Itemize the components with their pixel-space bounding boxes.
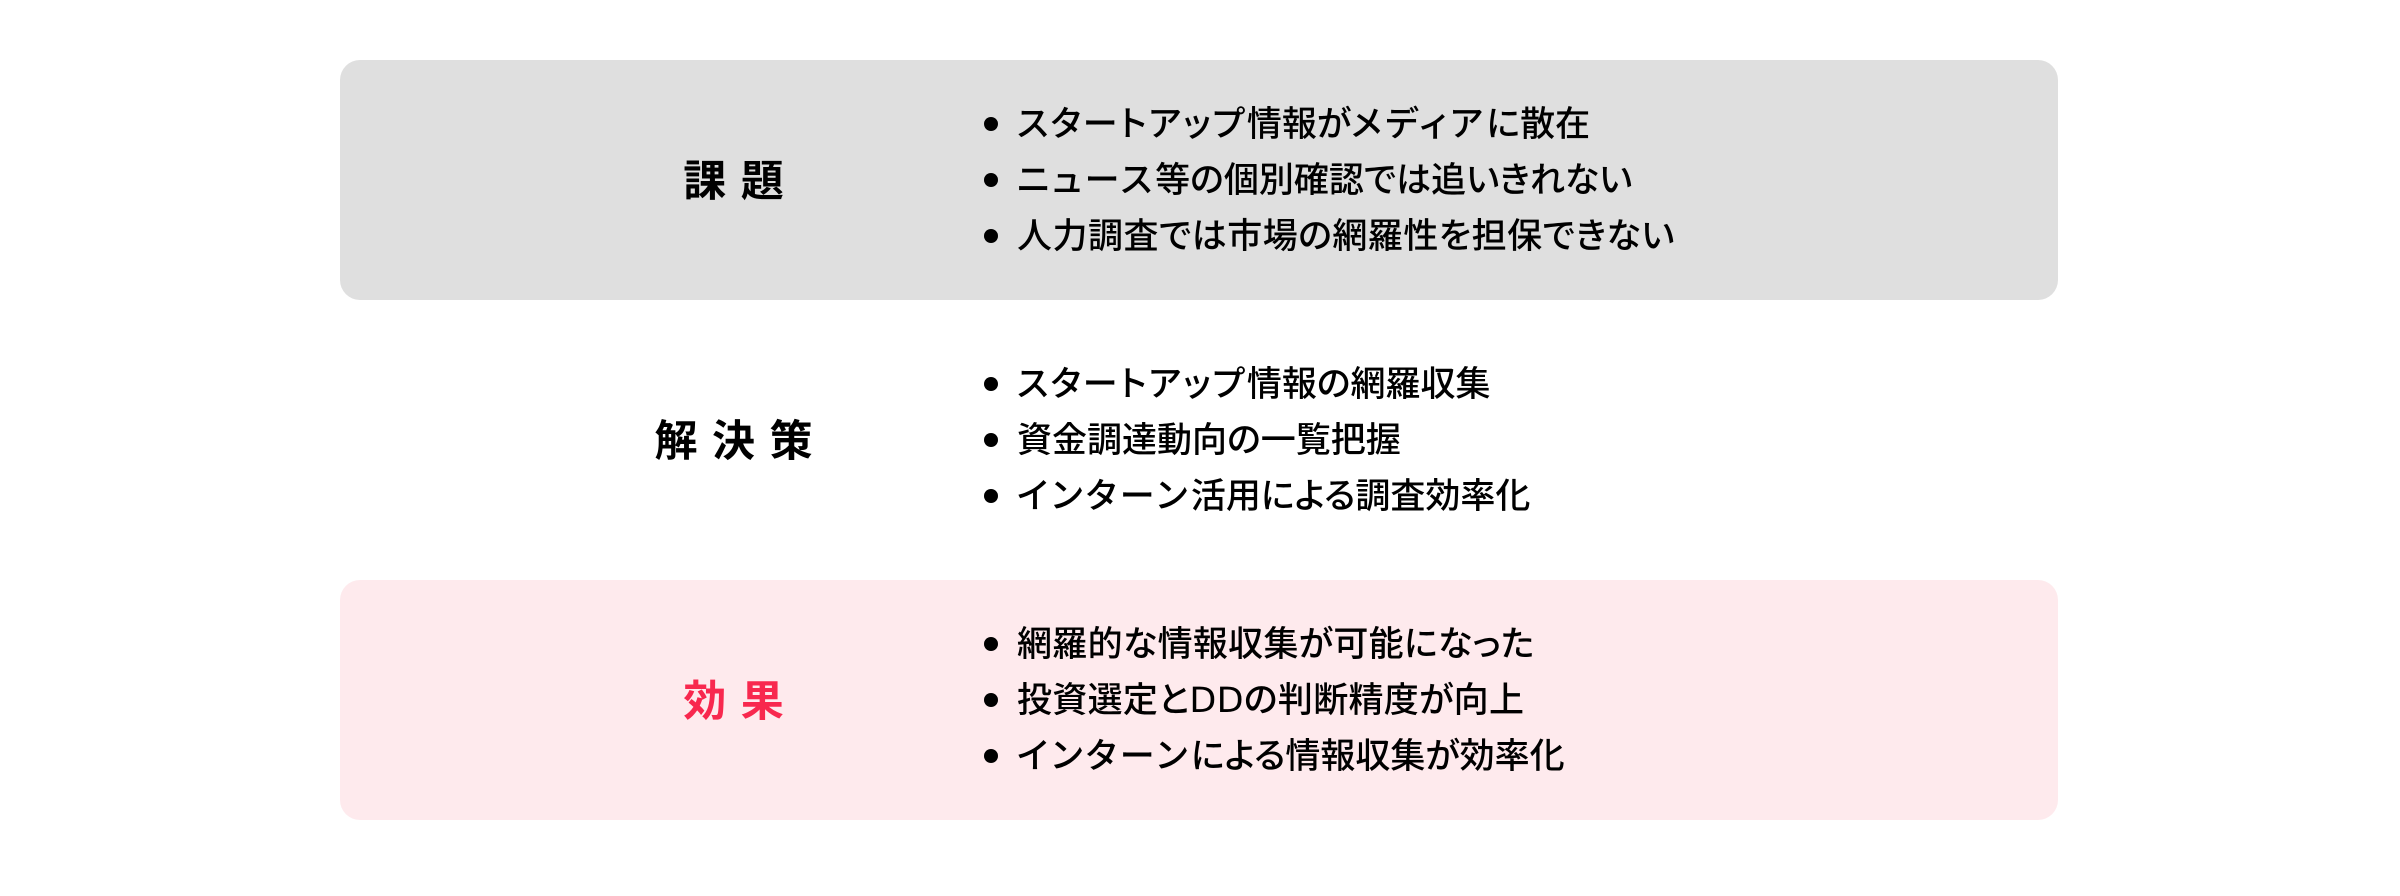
bullet: スタートアップ情報がメディアに散在: スタートアップ情報がメディアに散在 <box>1017 105 1590 144</box>
panel: 効果 <box>340 580 2058 820</box>
heading: 解決策: 解 決 策 <box>655 418 812 466</box>
bullet: 網羅的な情報収集が可能になった: 網羅的な情報収集が可能になった <box>1017 625 1534 664</box>
panel: 解決策 <box>655 365 1530 516</box>
heading: 課題: 課 題 <box>683 158 784 206</box>
bullet: ニュース等の個別確認では追いきれない: ニュース等の個別確認では追いきれない <box>1017 161 1632 200</box>
bullet: スタートアップ情報の網羅収集: スタートアップ情報の網羅収集 <box>1017 365 1491 404</box>
panel: 課題 <box>340 60 2058 300</box>
bullet: インターン活用による調査効率化: インターン活用による調査効率化 <box>1017 477 1530 516</box>
bullet: 資金調達動向の一覧把握: 資金調達動向の一覧把握 <box>1017 421 1401 460</box>
heading: 効果: 効 果 <box>683 678 784 726</box>
bullet: インターンによる情報収集が効率化: インターンによる情報収集が効率化 <box>1017 737 1565 776</box>
bullet: 投資選定とDDの判断精度が向上: 投資選定とDDの判断精度が向上 <box>1017 681 1524 721</box>
bullet: 人力調査では市場の網羅性を担保できない: 人力調査では市場の網羅性を担保できない <box>1017 217 1675 256</box>
